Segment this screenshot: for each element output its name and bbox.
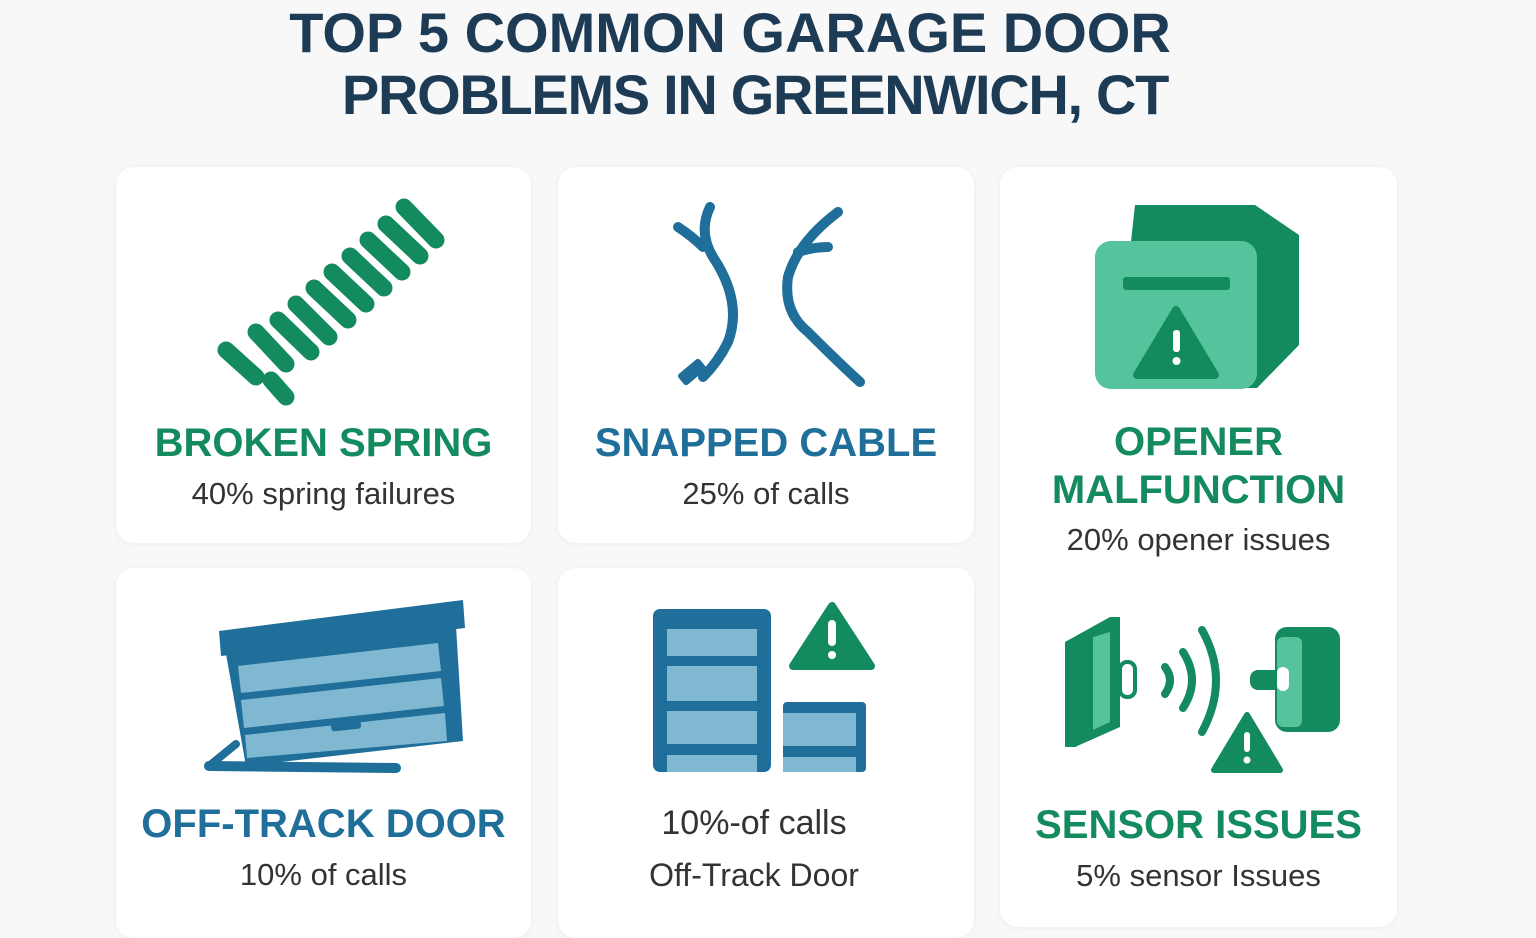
icon: door [204, 600, 465, 773]
icon: spring [218, 198, 444, 406]
heading: SNAPPED CABLE [595, 421, 937, 465]
icon: sensors [1065, 617, 1340, 773]
heading: OFF-TRACK DOOR [141, 802, 506, 846]
text: 10%-of calls [661, 804, 847, 842]
text: 5% sensor Issues [1076, 858, 1321, 893]
panel: off-track door 2 [558, 568, 974, 938]
icon: opener box [1095, 205, 1299, 389]
heading [1052, 420, 1345, 512]
heading: BROKEN SPRING [155, 421, 492, 465]
title [289, 1, 1171, 126]
text: 25% of calls [682, 476, 850, 511]
heading: MALFUNCTION [1052, 468, 1345, 512]
panel: broken spring [116, 167, 531, 543]
heading: SENSOR ISSUES [1035, 803, 1362, 847]
panel: opener and sensor [1000, 167, 1397, 927]
panel: off-track door [116, 568, 531, 938]
text: 40% spring failures [192, 476, 455, 511]
text: 10% of calls [240, 857, 407, 892]
text: Off-Track Door [649, 857, 859, 893]
panel: snapped cable [558, 167, 974, 543]
icon: panels with warning [653, 602, 875, 772]
icon: cable [673, 202, 865, 387]
title: TOP 5 COMMON GARAGE DOOR [289, 1, 1171, 64]
title: PROBLEMS IN GREENWICH, CT [342, 63, 1168, 126]
text: 20% opener issues [1067, 522, 1330, 557]
heading: OPENER [1114, 420, 1283, 464]
